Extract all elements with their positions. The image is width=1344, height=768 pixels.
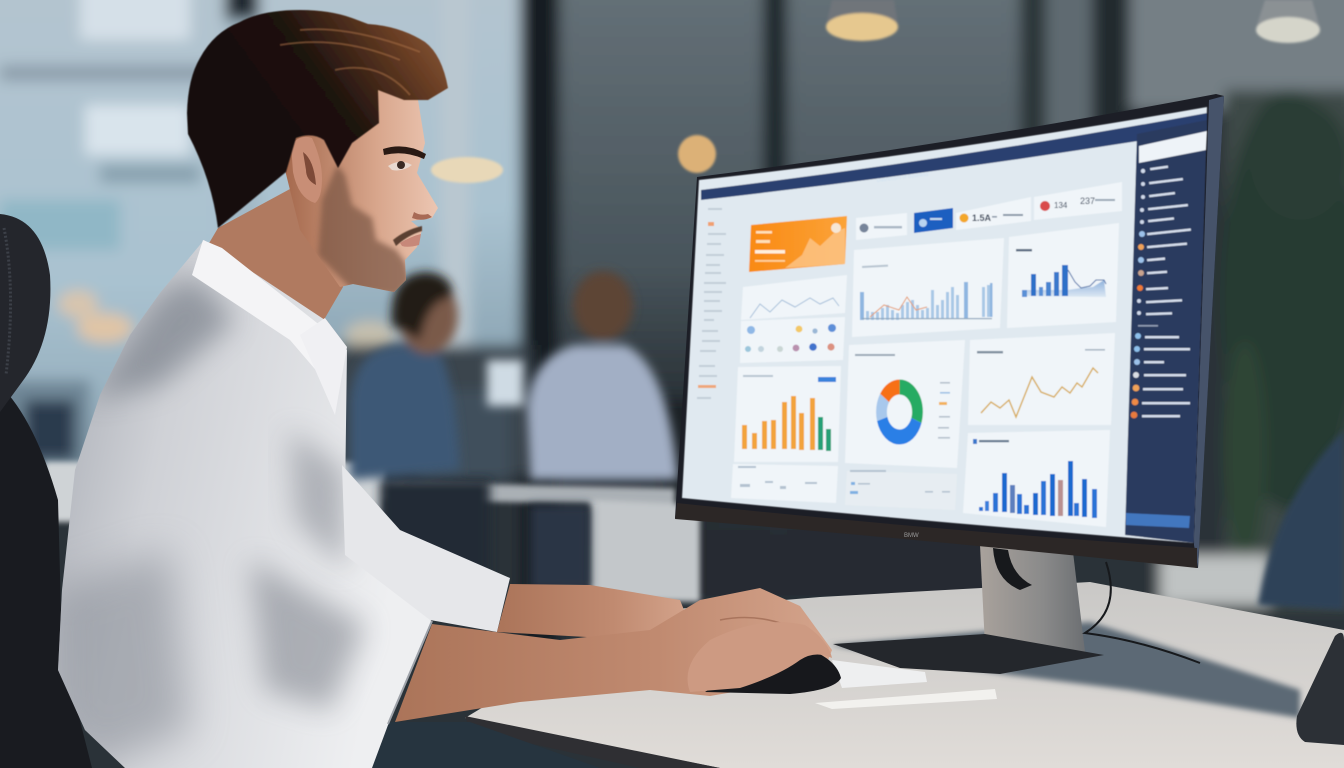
hair: [187, 10, 448, 228]
headrest stitching: [4, 228, 11, 375]
stand neck: [980, 545, 1085, 652]
shirt torso: [58, 240, 432, 768]
head: [285, 85, 438, 292]
hair strands: [280, 29, 420, 95]
pendant lamps and bokeh: [431, 0, 1320, 183]
chair: [0, 214, 600, 768]
header title: Dashboard of Business: [877, 172, 929, 184]
sidebar header: [1139, 131, 1207, 163]
right sidebar: [1125, 120, 1207, 543]
bezel side: [1194, 96, 1224, 568]
monitor shadow on desk: [830, 622, 1300, 718]
mouth: [400, 234, 421, 247]
background desk: [45, 462, 700, 602]
mixed bar chart: [860, 265, 992, 320]
small line chart: [750, 298, 839, 318]
orange trend: [870, 297, 927, 317]
left nav: [697, 208, 726, 399]
nose shadow: [412, 212, 432, 220]
line chart: [977, 349, 1105, 417]
paper: [815, 689, 997, 709]
collar: [192, 240, 345, 375]
bezel chin: [675, 503, 1197, 568]
lamp right: [1256, 0, 1320, 43]
inner ear: [303, 152, 316, 185]
monitor: [675, 94, 1224, 674]
chair back: [0, 385, 92, 768]
sidebar button: [1126, 513, 1190, 528]
hand on mouse: [688, 622, 832, 692]
fingers: [700, 618, 815, 680]
shirt shadows: [50, 275, 365, 768]
screen backdrop: [682, 107, 1207, 543]
monitor on back desk: [487, 360, 523, 406]
bokeh circle: [678, 135, 716, 173]
dot icons: [745, 324, 836, 352]
sidebar icons: [1131, 169, 1145, 418]
desk surface: [465, 582, 1344, 768]
cards: [731, 182, 1122, 527]
collar front: [300, 318, 347, 415]
far sleeve: [342, 465, 510, 632]
KPI tiles: 237: [1080, 196, 1095, 206]
eyebrow: [383, 146, 426, 159]
plant: [1220, 90, 1344, 510]
side fold shadow: [290, 430, 345, 570]
ear: [291, 137, 322, 203]
desk: [465, 582, 1344, 768]
lower back shadow: [50, 550, 190, 768]
lamp window: [431, 157, 503, 183]
orange card: [749, 216, 847, 272]
keyboard: [832, 660, 927, 688]
device right: [1296, 633, 1344, 745]
top strip: [701, 113, 1207, 200]
arm fold shadow: [250, 560, 365, 710]
chair armrest: [230, 748, 458, 768]
moustache: [393, 226, 422, 246]
mouse: [705, 645, 841, 694]
orange bar chart: [742, 375, 836, 451]
KPI tiles: 1.5A: [972, 213, 992, 223]
cable: [1085, 562, 1200, 663]
shoulder shadow: [90, 275, 235, 400]
stand slot: [993, 548, 1032, 590]
blue chair right: [1258, 430, 1344, 610]
lamp centre: [826, 0, 898, 41]
screen: [682, 107, 1207, 543]
desk front edge: [465, 716, 720, 768]
blue bar chart: [973, 439, 1097, 518]
beard: [318, 165, 410, 296]
iris: [397, 161, 405, 169]
brand mark: BMW: [904, 533, 919, 539]
window left: [0, 0, 232, 490]
KPI tiles: 134: [1054, 201, 1068, 210]
eye: [388, 162, 412, 170]
coworker left: [350, 272, 490, 580]
near cuff line: [388, 621, 432, 724]
near forearm: [395, 588, 832, 722]
donut chart: [855, 354, 950, 439]
area bar chart: [1016, 249, 1106, 297]
headrest: [0, 214, 50, 412]
KPI tiles: [860, 196, 1115, 233]
blurred coworkers: [350, 271, 678, 590]
bezel: [675, 94, 1224, 568]
neck: [205, 170, 345, 345]
sidebar rows: [1138, 165, 1191, 417]
stand base: [833, 634, 1104, 674]
far forearm: [497, 584, 690, 640]
lower arm under desk: [370, 722, 600, 768]
coworker right: [527, 271, 678, 590]
bottom table: [738, 466, 950, 494]
dark columns and walls: [560, 0, 770, 630]
man: [50, 10, 927, 768]
